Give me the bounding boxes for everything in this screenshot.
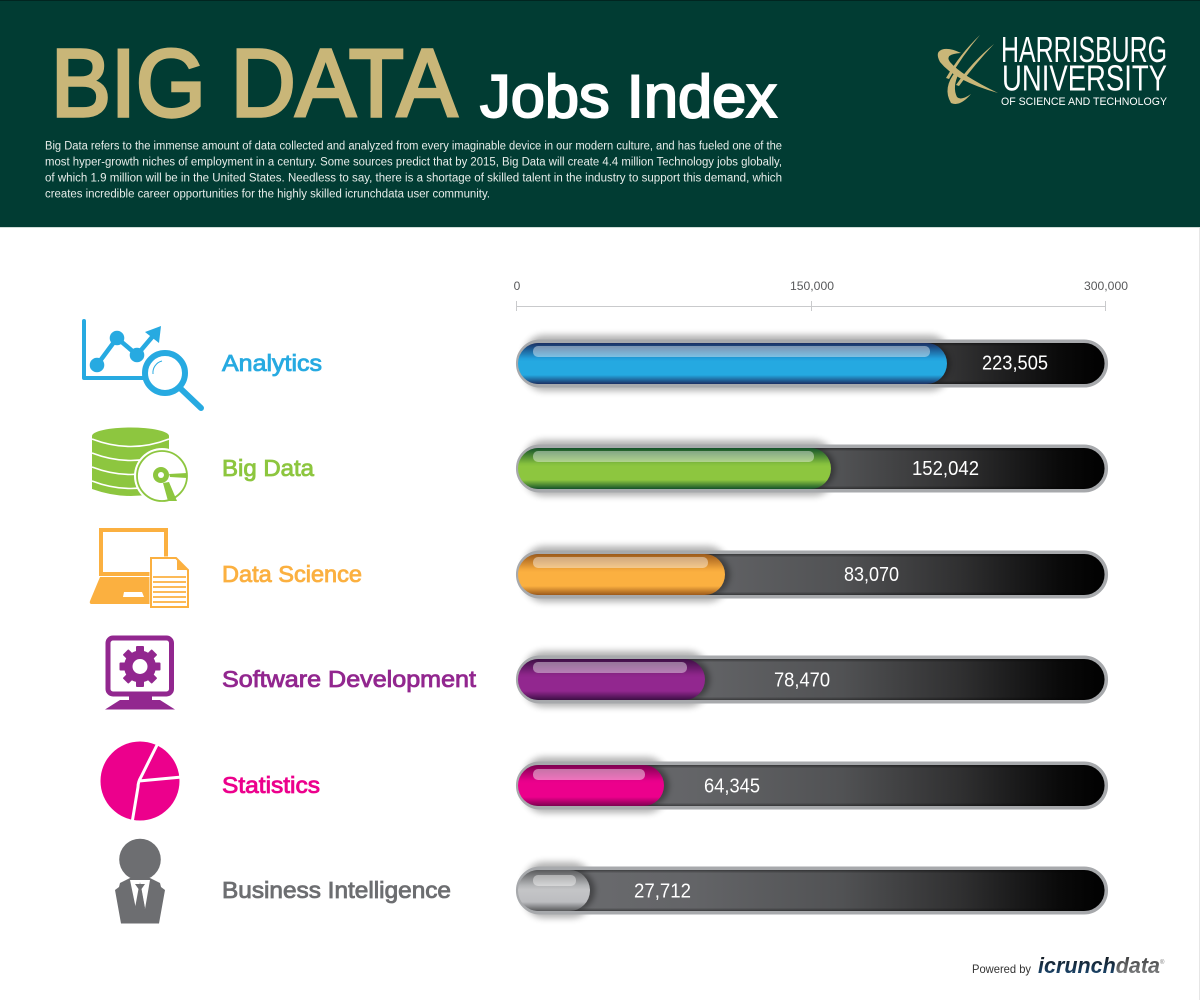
intro paragraph: creates incredible career opportunities for the highly skilled icrunchdata user community. xyxy=(45,188,490,200)
logo: icrunchdata: icrunchdata xyxy=(1038,953,1160,978)
registered mark: ® xyxy=(1160,959,1165,966)
label: Business Intelligence: Business Intelligence xyxy=(222,877,451,903)
logo: Harrisburg University xyxy=(938,29,1168,108)
icon: pie chart xyxy=(100,742,182,823)
axis label 300,000: 300,000 xyxy=(1084,279,1128,293)
intro paragraph: Big Data refers to the immense amount of data collected and analyzed from every imaginable device in our modern culture, and has fueled one of the xyxy=(45,140,782,152)
title: BIG DATA: BIG DATA xyxy=(51,30,457,137)
label: Software Development: Software Development xyxy=(222,666,476,692)
label: Statistics: Statistics xyxy=(222,772,320,798)
label: Analytics: Analytics xyxy=(222,350,322,376)
value: 83,070: 83,070 xyxy=(844,564,899,586)
value: 223,505: 223,505 xyxy=(982,352,1048,374)
bar: Analytics 223,505 xyxy=(500,335,1106,391)
header banner xyxy=(0,0,1200,228)
logo mark: gold swoosh xyxy=(938,35,998,104)
row: Statistics xyxy=(100,742,1106,823)
logo wordmark xyxy=(1001,29,1168,108)
footer credit xyxy=(972,953,1165,978)
row: Business Intelligence xyxy=(115,839,1106,924)
title: Jobs Index: Jobs Index xyxy=(480,63,777,130)
axis scale xyxy=(514,279,1128,311)
intro paragraph xyxy=(45,140,782,200)
axis label 0: 0 xyxy=(514,279,521,293)
icon: chart with magnifier xyxy=(84,321,201,408)
icon: database and disc xyxy=(92,428,190,504)
value: 78,470: 78,470 xyxy=(774,670,830,692)
row: Software Development xyxy=(105,638,1106,710)
bar: Software Development 78,470 xyxy=(500,651,1106,707)
row: Big Data xyxy=(92,428,1106,504)
value: 27,712: 27,712 xyxy=(634,880,691,902)
icon: laptop and document xyxy=(90,530,189,608)
icon: monitor with gear xyxy=(105,638,175,710)
row: Analytics xyxy=(84,321,1106,408)
axis label 150,000: 150,000 xyxy=(790,279,834,293)
bar: Big Data 152,042 xyxy=(500,440,1106,496)
bar: Business Intelligence 27,712 xyxy=(500,862,1106,918)
text: Powered by: Powered by xyxy=(972,962,1031,976)
icon: businessman xyxy=(115,839,165,924)
intro paragraph: of which 1.9 million will be in the United States. Needless to say, there is a shortage of skilled talent in the industry to support this demand, which xyxy=(45,172,782,184)
value: 64,345: 64,345 xyxy=(704,776,760,798)
intro paragraph: most hyper-growth niches of employment in a century. Some sources predict that by 2015, Big Data will create 4.4 million Technology jobs globally, xyxy=(45,156,782,168)
bar: Data Science 83,070 xyxy=(500,546,1106,602)
label: Big Data: Big Data xyxy=(222,455,315,481)
label: Data Science: Data Science xyxy=(222,561,362,587)
logo wordmark: OF SCIENCE AND TECHNOLOGY xyxy=(1001,96,1168,108)
value: 152,042: 152,042 xyxy=(912,458,979,480)
right page edge xyxy=(1199,228,1200,1000)
bar: Statistics 64,345 xyxy=(500,757,1106,813)
row: Data Science xyxy=(90,530,1106,608)
